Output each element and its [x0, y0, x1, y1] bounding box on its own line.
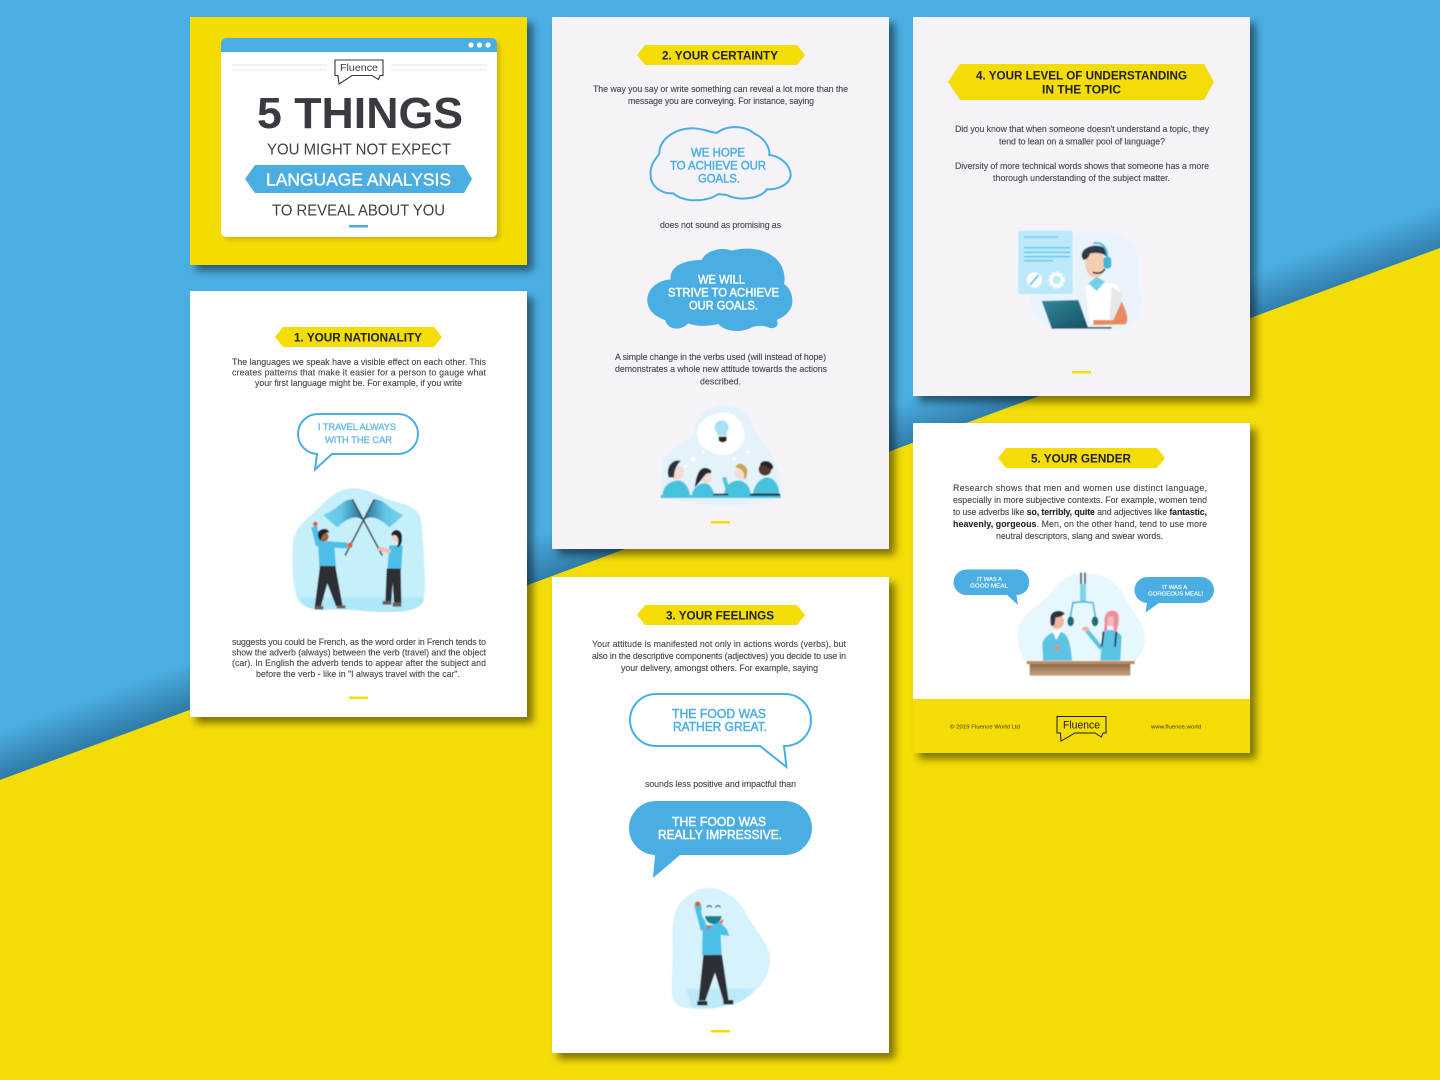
intro text: your first language might be. For example, if you write — [255, 378, 462, 388]
heading — [637, 45, 805, 65]
accent dash — [1072, 371, 1091, 374]
accent dash — [349, 225, 368, 228]
speech bubble: outlined: THE FOOD WAS — [672, 707, 766, 721]
bubble: it was a good meal: GOOD MEAL — [970, 584, 1008, 590]
panel: 4 your level of understanding — [913, 17, 1250, 396]
bubble: it was a gorgeous meal: IT WAS A — [1162, 585, 1187, 591]
accent dash — [349, 696, 368, 699]
ribbon: language analysis — [245, 165, 472, 193]
heading — [637, 605, 805, 625]
cloud: filled — [647, 249, 792, 331]
cloud: outlined: TO ACHIEVE OUR — [670, 160, 766, 172]
intro text — [593, 84, 848, 106]
intro text — [592, 639, 847, 673]
heading — [275, 327, 442, 347]
speech bubble: filled: THE FOOD WAS — [672, 815, 766, 829]
cloud: outlined: WE HOPE — [691, 148, 745, 160]
panel: 3 your feelings — [552, 577, 889, 1053]
illustration: two people crossing flags — [292, 488, 425, 612]
intro text: Your attitude is manifested not only in actions words (verbs), but — [592, 639, 847, 649]
body text: Research shows that men and women use distinct language, — [953, 483, 1207, 493]
speech bubble: outlined: RATHER GREAT. — [673, 720, 767, 734]
logo: Fluence — [1057, 716, 1106, 741]
intro text: message you are conveying. For instance, saying — [628, 96, 814, 106]
explanation text — [232, 637, 487, 679]
accent dash — [711, 1030, 730, 1032]
body text: especially in more subjective contexts. For example, women tend — [953, 495, 1207, 505]
accent dash — [711, 521, 730, 524]
cloud: outlined — [651, 127, 791, 200]
explanation text: A simple change in the verbs used (will instead of hope) — [615, 352, 826, 362]
explanation text: (car). In English the adverb tends to appear after the subject and — [232, 658, 486, 668]
cloud: filled: WE WILL — [698, 274, 746, 286]
panel: 2 your certainty — [552, 17, 889, 549]
ribbon: language analysis: LANGUAGE ANALYSIS — [266, 170, 451, 190]
browser window card — [221, 38, 497, 237]
explanation text: show the adverb (always) between the verb (travel) and the object — [232, 648, 487, 658]
cloud: outlined: GOALS. — [698, 174, 740, 186]
explanation text: demonstrates a whole new attitude towards the actions — [615, 364, 828, 374]
body text: to use adverbs like so, terribly, quite and adjectives like fantastic, — [953, 507, 1207, 517]
intro text: The languages we speak have a visible effect on each other. This — [232, 357, 487, 367]
copyright: © 2019 Fluence World Ltd — [950, 724, 1020, 730]
speech bubble: I TRAVEL ALWAYS — [318, 422, 396, 432]
body text: tend to lean on a smaller pool of language? — [999, 136, 1165, 146]
body text: Did you know that when someone doesn't understand a topic, they — [955, 124, 1210, 134]
cloud: filled: OUR GOALS. — [689, 300, 758, 312]
speech bubble — [298, 414, 418, 470]
logo: Fluence — [335, 60, 383, 84]
heading: 5. YOUR GENDER — [1031, 452, 1131, 466]
panel: 1 your nationality — [190, 291, 527, 717]
illustration: person with laughing mask — [671, 888, 770, 1009]
illustration: two presenters at a radio desk — [1017, 573, 1145, 676]
illustration: support agent at laptop — [1018, 231, 1141, 330]
heading: 4. YOUR LEVEL OF UNDERSTANDING — [976, 68, 1187, 82]
subtitle: to reveal about you: TO REVEAL ABOUT YOU — [272, 202, 445, 220]
explanation text: described. — [700, 376, 741, 386]
logo: Fluence: Fluence — [1063, 720, 1100, 732]
heading — [948, 64, 1214, 100]
intro text: your delivery, amongst others. For example, saying — [621, 663, 818, 673]
heading: 3. YOUR FEELINGS — [666, 608, 774, 622]
explanation text: before the verb - like in "I always travel with the car". — [256, 669, 460, 679]
logo: Fluence: Fluence — [340, 62, 378, 74]
explanation text: suggests you could be French, as the word order in French tends to — [232, 637, 486, 647]
heading: 1. YOUR NATIONALITY — [294, 330, 422, 344]
body text: thorough understanding of the subject matter. — [993, 173, 1170, 183]
intro text: also in the descriptive components (adjectives) you decide to use in — [592, 651, 846, 661]
connector text: sounds less positive and impactful than — [645, 779, 796, 789]
heading: IN THE TOPIC — [1042, 82, 1121, 96]
cloud: filled: STRIVE TO ACHIEVE — [668, 288, 779, 300]
intro text: The way you say or write something can reveal a lot more than the — [593, 84, 848, 94]
body text: Diversity of more technical words shows that someone has a more — [955, 161, 1209, 171]
body text — [953, 483, 1207, 541]
subtitle: you might not expect: YOU MIGHT NOT EXPECT — [267, 142, 452, 158]
intro text: creates patterns that make it easier for a person to gauge what — [232, 368, 487, 378]
footer band — [913, 699, 1250, 753]
heading: 2. YOUR CERTAINTY — [662, 48, 778, 62]
panel: 5 your gender — [913, 423, 1250, 753]
heading — [998, 448, 1165, 468]
speech bubble: outlined — [630, 694, 811, 767]
bubble: it was a good meal — [954, 569, 1029, 605]
bubble: it was a good meal: IT WAS A — [977, 577, 1002, 583]
speech bubble: filled: REALLY IMPRESSIVE. — [658, 828, 782, 842]
illustration: team thinking with light bulb — [661, 405, 781, 505]
body text: neutral descriptors, slang and swear words. — [996, 531, 1163, 541]
title: 5 things: 5 THINGS — [257, 89, 463, 138]
connector text: does not sound as promising as — [660, 220, 782, 230]
website: www.fluence.world — [1150, 724, 1201, 730]
speech bubble: filled — [629, 801, 812, 878]
panel: cover — [190, 17, 527, 265]
bubble: it was a gorgeous meal: GORGEOUS MEAL! — [1148, 592, 1204, 598]
speech bubble: WITH THE CAR — [325, 435, 393, 445]
body text — [955, 124, 1210, 183]
explanation text — [615, 352, 828, 386]
body text: heavenly, gorgeous. Men, on the other hand, tend to use more — [953, 519, 1207, 529]
bubble: it was a gorgeous meal — [1134, 577, 1214, 612]
intro text — [232, 357, 487, 388]
